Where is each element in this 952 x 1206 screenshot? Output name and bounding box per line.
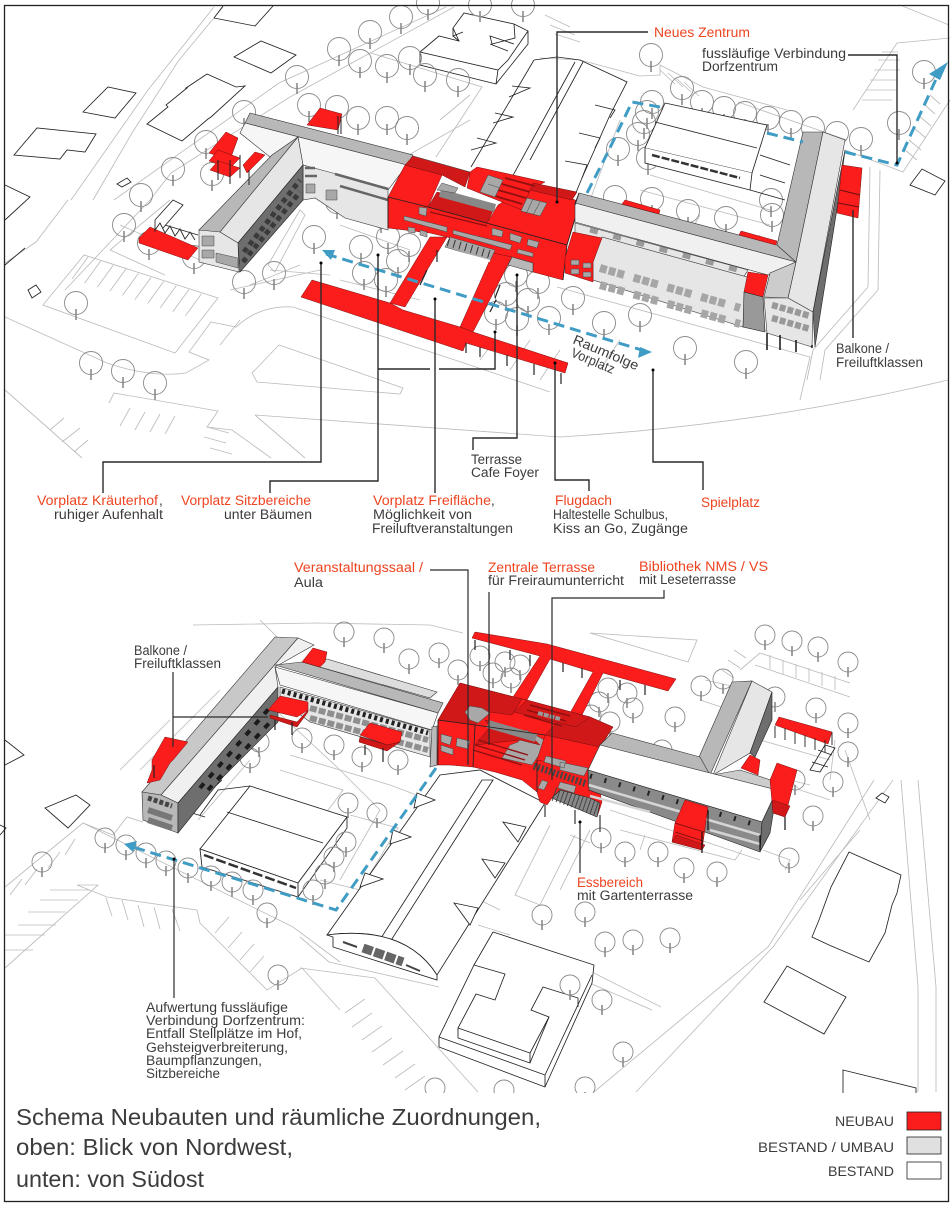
labels: top view: ruhiger Aufenhalt xyxy=(54,507,163,522)
existing houses: top view xyxy=(5,6,945,298)
existing houses and hall: bottom view xyxy=(0,740,916,1093)
labels: top view: Flugdach xyxy=(555,493,612,508)
legend: BESTAND xyxy=(828,1163,894,1179)
new red centre: bottom view xyxy=(437,632,676,832)
labels: top view: Dorfzentrum xyxy=(702,59,778,74)
labels: bottom view: Aufwertung fussläufige xyxy=(146,1000,288,1015)
labels: bottom view: mit Leseterrasse xyxy=(639,572,736,587)
site plan ground lines: top view xyxy=(5,5,950,458)
labels: bottom view: Baumpflanzungen, xyxy=(146,1053,262,1068)
labels: bottom view: Bibliothek NMS / VS xyxy=(639,559,768,574)
labels: top view: , xyxy=(159,493,163,508)
labels: bottom view: für Freiraumunterricht xyxy=(488,573,624,588)
label: Raumfolge Vorplatz: Vorplatz xyxy=(569,345,617,377)
labels: top view: Vorplatz Sitzbereiche xyxy=(181,493,311,508)
new red centre: top view xyxy=(301,156,580,384)
labels: bottom view: Balkone / xyxy=(134,643,187,658)
labels: bottom view xyxy=(134,559,768,1081)
legend xyxy=(758,1112,941,1179)
labels: bottom view: Zentrale Terrasse xyxy=(488,560,595,575)
dashed path: bottom view xyxy=(124,768,436,910)
label: Raumfolge Vorplatz: Raumfolge xyxy=(571,332,641,373)
labels: bottom view: Aula xyxy=(294,575,324,590)
labels: bottom view: Entfall Stellplätze im Hof, xyxy=(146,1026,302,1041)
labels: top view: Neues Zentrum xyxy=(654,25,750,40)
site plan ground lines: bottom view xyxy=(5,620,936,1092)
labels: top view: Cafe Foyer xyxy=(471,465,540,480)
title block: oben: Blick von Nordwest, xyxy=(16,1134,293,1160)
labels: bottom view: Freiluftklassen xyxy=(134,656,221,671)
building: left wings, bottom view xyxy=(142,637,443,833)
labels: top view: Terrasse xyxy=(471,452,522,467)
legend: NEUBAU xyxy=(835,1113,894,1129)
new red balconies and canopy: left of wing, top view xyxy=(139,108,342,260)
labels: bottom view: Sitzbereiche xyxy=(146,1066,220,1081)
labels: top view: Spielplatz xyxy=(701,495,760,510)
title block xyxy=(16,1104,541,1192)
labels: top view: Vorplatz Freifläche xyxy=(373,493,491,508)
leader lines: bottom view xyxy=(172,570,664,998)
labels: top view: Freiluftveranstaltungen xyxy=(372,521,513,536)
leader lines: top view xyxy=(103,32,898,493)
building: left wing, top view xyxy=(199,113,413,272)
labels: top view: Vorplatz Kräuterhof xyxy=(37,493,158,508)
trees: bottom view xyxy=(32,622,858,1105)
labels: bottom view: Gehsteigverbreiterung, xyxy=(146,1040,288,1055)
labels: top view: Kiss an Go, Zugänge xyxy=(553,521,688,536)
building: right wing, bottom view xyxy=(588,681,835,853)
labels: top view: fussläufige Verbindung xyxy=(702,46,846,61)
building: right wing, top view xyxy=(565,132,862,352)
labels: top view: Freiluftklassen xyxy=(836,355,923,370)
legend: BESTAND / UMBAU xyxy=(758,1139,894,1155)
labels: bottom view: Veranstaltungssaal / xyxy=(294,560,423,575)
labels: bottom view: Essbereich xyxy=(577,875,643,890)
labels: top view: Möglichkeit von xyxy=(373,507,472,522)
labels: bottom view: Verbindung Dorfzentrum: xyxy=(146,1013,305,1028)
dashed path: top view xyxy=(322,62,948,358)
existing hall and fins: top view xyxy=(471,57,790,200)
labels: top view: , xyxy=(491,493,495,508)
labels: top view: unter Bäumen xyxy=(224,507,312,522)
labels: bottom view: mit Gartenterrasse xyxy=(577,888,693,903)
labels: top view xyxy=(37,25,923,536)
caption panel background xyxy=(5,1093,948,1201)
trees: top view xyxy=(64,0,936,400)
labels: top view: Haltestelle Schulbus, xyxy=(553,507,668,522)
title block: unten: von Südost xyxy=(16,1166,205,1192)
title block: Schema Neubauten und räumliche Zuordnungen, xyxy=(16,1104,541,1130)
labels: top view: Balkone / xyxy=(836,341,889,356)
